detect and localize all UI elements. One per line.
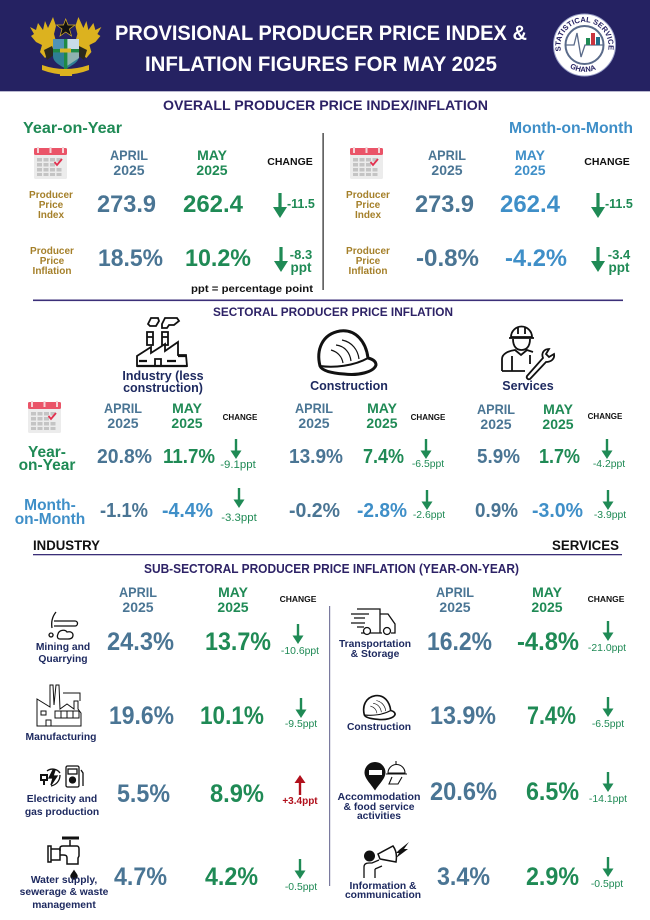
row: construction: 7.4% xyxy=(527,702,576,730)
heading: industry: INDUSTRY xyxy=(33,538,100,553)
row: producer price index: -11.5 xyxy=(287,197,315,211)
header banner xyxy=(0,0,650,92)
row: producer price inflation: -8.3 xyxy=(290,247,312,262)
row: accommodation and food xyxy=(338,761,627,822)
column: industry: -3.3ppt xyxy=(221,512,258,524)
row: manufacturing: 10.1% xyxy=(200,702,264,730)
row label: year-on-year: on-Year xyxy=(19,457,75,474)
column: industry: 20.8% xyxy=(97,446,152,468)
row: water supply: sewerage & waste xyxy=(20,887,109,898)
column: construction: CHANGE xyxy=(411,413,446,422)
icon: delivery truck xyxy=(351,609,395,634)
row: mining and quarrying: Mining and xyxy=(36,642,90,653)
row: water supply: 4.2% xyxy=(205,863,258,891)
row: producer price index: Price xyxy=(39,200,64,211)
column: construction: -0.2% xyxy=(289,500,340,522)
row: water supply: 4.7% xyxy=(114,863,167,891)
icon: red up arrow xyxy=(294,775,306,795)
column heads: 2025 xyxy=(514,162,546,178)
icon: worker with wrench xyxy=(502,326,554,379)
row: water supply: management xyxy=(32,900,96,911)
row: producer price index: Producer xyxy=(29,190,73,201)
column: construction: MAY xyxy=(367,400,398,416)
row label: year-on-year xyxy=(19,444,75,474)
icon: helmet xyxy=(319,331,376,375)
column heads: 2025 xyxy=(431,162,463,178)
row: producer price index xyxy=(29,190,315,221)
row: mining and quarrying: 13.7% xyxy=(205,628,271,656)
row: information and communication: Information & xyxy=(350,881,417,892)
sector label: industry: construction) xyxy=(123,381,203,395)
row: electricity and gas xyxy=(25,766,318,818)
row: producer price index: -11.5 xyxy=(605,197,633,211)
row: construction: Construction xyxy=(347,722,411,733)
row: producer price inflation: Inflation xyxy=(33,266,71,277)
row: producer price inflation xyxy=(346,245,631,277)
column: services: CHANGE xyxy=(588,412,623,421)
column: construction: -2.6ppt xyxy=(413,510,445,521)
row: mining and quarrying xyxy=(36,612,319,665)
row: manufacturing: -9.5ppt xyxy=(285,719,317,730)
column heads: APRIL xyxy=(428,147,466,163)
icon: Ghana coat of arms xyxy=(30,17,101,76)
icon: Ghana Statistical Service logo: GHANA xyxy=(570,64,596,72)
icon: Ghana Statistical Service logo: STATISTICAL SERVICE xyxy=(555,16,614,51)
row: accommodation and food: & food service xyxy=(344,802,415,813)
sector label: construction: Construction xyxy=(310,379,388,393)
column heads: 2025 xyxy=(122,599,154,615)
column heads: CHANGE xyxy=(267,156,313,168)
row: producer price inflation: Inflation xyxy=(349,266,387,277)
row: mining and quarrying: 24.3% xyxy=(107,628,174,656)
row: producer price index: 273.9 xyxy=(415,191,474,218)
row: producer price index: Index xyxy=(355,210,381,221)
icon: calendar xyxy=(350,147,383,179)
icon: Ghana Statistical Service logo xyxy=(553,14,616,76)
row: electricity and gas: 8.9% xyxy=(210,780,264,808)
row: transportation and storage: -21.0ppt xyxy=(588,643,626,654)
icon: water tap xyxy=(48,838,79,879)
row: transportation and storage: 16.2% xyxy=(427,628,492,656)
icon: calendar xyxy=(34,147,67,179)
row: manufacturing: Manufacturing xyxy=(26,732,96,743)
row: producer price inflation: ppt xyxy=(608,260,630,275)
row: accommodation and food: activities xyxy=(357,811,401,822)
column: construction: -6.5ppt xyxy=(412,459,444,470)
column: construction: 7.4% xyxy=(363,446,404,468)
row: transportation and storage: -4.8% xyxy=(517,628,579,656)
heading: sub-sectoral: SUB-SECTORAL PRODUCER PRICE INFLATION (YEAR-ON-YEAR) xyxy=(144,562,519,576)
column heads: 2025 xyxy=(439,599,471,615)
row: electricity and gas: gas production xyxy=(25,807,99,818)
row: producer price inflation: -4.2% xyxy=(505,245,567,272)
column heads: MAY xyxy=(218,584,249,600)
column: industry: -9.1ppt xyxy=(220,459,257,471)
icon: factory xyxy=(137,318,187,366)
column: services: APRIL xyxy=(477,401,515,417)
icon: helmet small xyxy=(364,696,395,720)
heading: services: SERVICES xyxy=(552,538,619,553)
column heads xyxy=(110,147,313,178)
column heads: MAY xyxy=(197,147,228,163)
row: producer price inflation: -0.8% xyxy=(416,245,479,272)
icon: pickaxe and rocks xyxy=(49,612,78,639)
column heads: APRIL xyxy=(119,584,157,600)
row: producer price inflation: ppt xyxy=(290,260,312,275)
row: water supply: Water supply, xyxy=(31,875,97,886)
column: industry: 2025 xyxy=(171,415,203,431)
column heads: 2025 xyxy=(113,162,145,178)
panel: sectoral producer price inflation xyxy=(15,318,626,528)
row: transportation and storage: Transportation xyxy=(339,639,411,650)
column: services: 2025 xyxy=(480,416,512,432)
panel: industry sub-sectors xyxy=(20,584,319,911)
row: accommodation and food: 20.6% xyxy=(430,778,497,806)
row: producer price index: Producer xyxy=(346,190,390,201)
column heads: MAY xyxy=(532,584,563,600)
column: industry: APRIL xyxy=(104,400,142,416)
row: producer price index: 273.9 xyxy=(97,191,156,218)
icon: person with megaphone xyxy=(364,842,409,878)
column heads: 2025 xyxy=(196,162,228,178)
title xyxy=(115,22,527,76)
row: electricity and gas: Electricity and xyxy=(27,794,97,805)
row: water supply xyxy=(20,838,317,911)
row: construction xyxy=(347,696,624,733)
row: information and communication: 3.4% xyxy=(437,863,490,891)
row: manufacturing: 19.6% xyxy=(109,702,174,730)
row: producer price inflation: Price xyxy=(40,256,65,267)
column: services: 1.7% xyxy=(539,446,580,468)
column heads: CHANGE xyxy=(584,156,630,168)
icon: bed pin and serving dish xyxy=(364,761,407,790)
row label: month-on-month: Month- xyxy=(24,497,76,514)
sector label: industry: Industry (less xyxy=(122,369,204,383)
row: information and communication xyxy=(345,842,623,901)
sector label: industry xyxy=(122,369,204,395)
row: information and communication: -0.5ppt xyxy=(591,879,623,890)
column heads: CHANGE xyxy=(588,594,625,604)
row: producer price inflation: 10.2% xyxy=(185,245,251,272)
column: industry: -4.4% xyxy=(162,500,213,522)
row: electricity and gas: 5.5% xyxy=(117,780,170,808)
column: services: 5.9% xyxy=(477,446,520,468)
column heads: MAY xyxy=(515,147,546,163)
row: construction: 13.9% xyxy=(430,702,496,730)
column: services: -4.2ppt xyxy=(593,459,625,470)
column: construction: APRIL xyxy=(295,400,333,416)
row: producer price inflation: Price xyxy=(356,256,381,267)
row: electricity and gas: +3.4ppt xyxy=(282,796,318,807)
icon: calendar xyxy=(28,401,61,433)
column heads xyxy=(436,584,625,615)
row: construction: -6.5ppt xyxy=(592,719,624,730)
row: producer price inflation xyxy=(30,245,312,277)
title: PROVISIONAL PRODUCER PRICE INDEX & xyxy=(115,22,527,45)
column: construction: 2025 xyxy=(366,415,398,431)
column: construction: -2.8% xyxy=(357,500,407,522)
row: information and communication: 2.9% xyxy=(526,863,579,891)
heading: sectoral: SECTORAL PRODUCER PRICE INFLATION xyxy=(213,305,453,319)
row: producer price index: 262.4 xyxy=(500,191,561,218)
column: services: 2025 xyxy=(542,416,574,432)
row: producer price index: Index xyxy=(38,210,64,221)
panel: services sub-sectors xyxy=(338,584,627,901)
icon: plug and fuel pump xyxy=(41,766,83,787)
row: transportation and storage xyxy=(339,609,626,660)
column: construction xyxy=(289,400,446,522)
row: accommodation and food: -14.1ppt xyxy=(589,794,627,805)
column: industry: CHANGE xyxy=(223,413,258,422)
column heads: APRIL xyxy=(436,584,474,600)
column: industry: -1.1% xyxy=(100,500,148,522)
column heads xyxy=(428,147,630,178)
row label: month-on-month xyxy=(15,497,85,528)
row: water supply: -0.5ppt xyxy=(285,882,317,893)
row: manufacturing xyxy=(26,685,317,743)
row: mining and quarrying: -10.6ppt xyxy=(281,646,319,657)
column: services: -3.9ppt xyxy=(594,510,626,521)
row: producer price inflation: -3.4 xyxy=(608,247,631,262)
heading: overall PPI: OVERALL PRODUCER PRICE INDEX/INFLATION xyxy=(163,97,488,113)
title: INFLATION FIGURES FOR MAY 2025 xyxy=(145,53,497,76)
row: producer price inflation: Producer xyxy=(30,246,74,257)
row: information and communication: communication xyxy=(345,890,421,901)
panel: year-on-year overall xyxy=(23,120,315,295)
icon: manufacturing plant xyxy=(37,685,81,726)
note: ppt definition: ppt = percentage point xyxy=(191,283,314,295)
column heads: 2025 xyxy=(531,599,563,615)
panel: month-on-month overall xyxy=(346,120,633,277)
column: services: -3.0% xyxy=(532,500,583,522)
column: industry xyxy=(97,400,258,524)
sector label: services: Services xyxy=(502,379,554,393)
row label: year-on-year: Year- xyxy=(28,444,66,461)
row: producer price inflation: 18.5% xyxy=(98,245,163,272)
column: services xyxy=(475,401,626,522)
row: producer price inflation: Producer xyxy=(346,246,390,257)
column: industry: 11.7% xyxy=(163,446,215,468)
column: industry: MAY xyxy=(172,400,203,416)
column heads: 2025 xyxy=(217,599,249,615)
row: producer price index: 262.4 xyxy=(183,191,244,218)
row: producer price index: Price xyxy=(356,200,381,211)
column: services: MAY xyxy=(543,401,574,417)
column: construction: 13.9% xyxy=(289,446,343,468)
column heads: CHANGE xyxy=(280,594,317,604)
column: services: 0.9% xyxy=(475,500,518,522)
column heads xyxy=(119,584,317,615)
row: transportation and storage: & Storage xyxy=(351,649,400,660)
column: construction: 2025 xyxy=(298,415,330,431)
column heads: APRIL xyxy=(110,147,148,163)
row: mining and quarrying: Quarrying xyxy=(38,654,88,665)
row label: month-on-month: on-Month xyxy=(15,511,85,528)
row: accommodation and food: 6.5% xyxy=(526,778,579,806)
subheading: month-on-month: Month-on-Month xyxy=(509,120,633,137)
row: accommodation and food: Accommodation xyxy=(338,792,420,803)
row: producer price index xyxy=(346,190,633,221)
subheading: year-on-year: Year-on-Year xyxy=(23,120,122,137)
column: industry: 2025 xyxy=(107,415,139,431)
